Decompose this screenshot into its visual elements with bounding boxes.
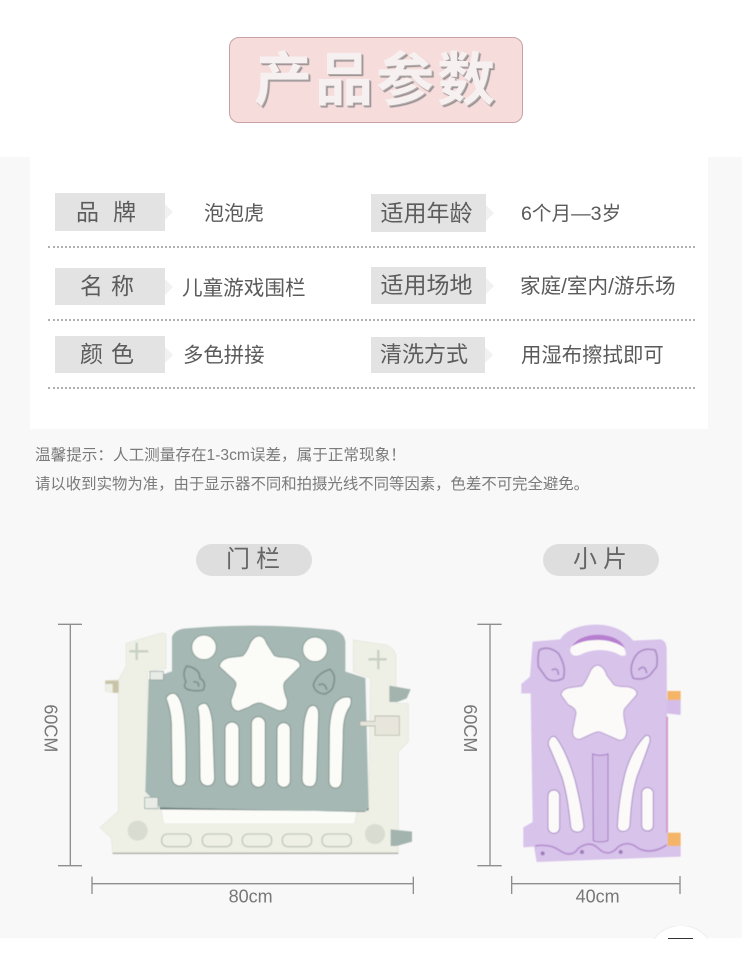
central rib: [593, 754, 608, 842]
note line 2: 请以收到实物为准，由于显示器不同和拍摄光线不同等因素，色差不可完全避免。: [35, 476, 589, 493]
small panel height dimension: [477, 624, 502, 866]
left tab shadow: [105, 681, 119, 693]
diagram: small panel: [460, 624, 682, 907]
bottom badge: [654, 926, 708, 939]
small panel width label: 40cm: [576, 887, 620, 907]
diagram: gate panel: [41, 624, 414, 907]
label: name: [55, 268, 165, 305]
base dots: [541, 850, 623, 855]
wave base line: [535, 844, 667, 854]
star hole: [219, 636, 300, 711]
bottom bar shade: [113, 853, 398, 854]
hinge clips: [145, 671, 163, 809]
note line 1: 温馨提示：人工测量存在1-3cm误差，属于正常现象！: [35, 447, 406, 464]
small panel illustration: [521, 625, 681, 862]
gate height dimension: [58, 624, 82, 866]
swirl ornaments: [538, 648, 657, 681]
title banner: 产品参数: [254, 48, 498, 113]
divider 2: [48, 319, 695, 321]
slot holes: [548, 735, 653, 833]
label: brand: [55, 193, 165, 231]
label: name: 名称: [80, 273, 142, 299]
bar slots: [166, 693, 351, 788]
label: suitable venue: 适用场地: [380, 272, 472, 298]
value: name: 儿童游戏围栏: [182, 277, 306, 300]
value: brand: 泡泡虎: [204, 203, 264, 225]
circle holes: [192, 635, 216, 660]
pill heading: gate: [196, 544, 312, 576]
cream outer frame: [100, 633, 408, 853]
badge line: [668, 938, 693, 939]
label: colour: 颜色: [80, 341, 142, 367]
base grooves: [162, 834, 351, 847]
gate width dimension: [92, 877, 413, 894]
divider 3: [48, 387, 695, 389]
lilac body: [521, 625, 681, 862]
value: colour: 多色拼接: [183, 345, 265, 367]
gate height label: 60CM: [41, 704, 61, 752]
latch: [360, 716, 399, 735]
small panel height label: 60CM: [460, 704, 480, 752]
pill heading: small panel: 小片: [573, 546, 633, 573]
handle hole: [570, 635, 626, 656]
value: suitable age: 6个月—3岁: [521, 203, 621, 225]
small panel width dimension: [512, 876, 680, 894]
label: colour: [55, 336, 165, 373]
star marks: [129, 643, 387, 669]
gate width label: 80cm: [229, 887, 273, 907]
label: brand: 品牌: [76, 199, 150, 225]
label: suitable age: [371, 194, 486, 232]
label: suitable age: 适用年龄: [380, 200, 472, 226]
badge circle: [648, 926, 714, 974]
value: suitable venue: 家庭/室内/游乐场: [520, 275, 676, 298]
swirl ornaments: [184, 666, 334, 694]
label: cleaning method: [371, 337, 485, 373]
pill heading: small panel: [543, 544, 659, 576]
label: cleaning method: 清洗方式: [380, 342, 468, 367]
star hole: [561, 665, 637, 740]
panel: parameters table: [30, 157, 708, 429]
corner dimples: [128, 821, 148, 841]
page background band: [0, 157, 742, 938]
lilac tab: [667, 700, 681, 715]
lower opening: [163, 810, 356, 823]
value: cleaning method: 用湿布擦拭即可: [521, 345, 664, 367]
gate illustration: [100, 626, 412, 854]
teal inner gate: [145, 626, 369, 812]
pill heading: gate: 门栏: [226, 546, 286, 573]
divider 1: [48, 246, 695, 248]
orange connectors: [667, 691, 681, 701]
right shade edge: [666, 717, 668, 833]
title banner: [229, 37, 523, 123]
label: suitable venue: [371, 267, 486, 304]
side connectors: [389, 686, 412, 846]
